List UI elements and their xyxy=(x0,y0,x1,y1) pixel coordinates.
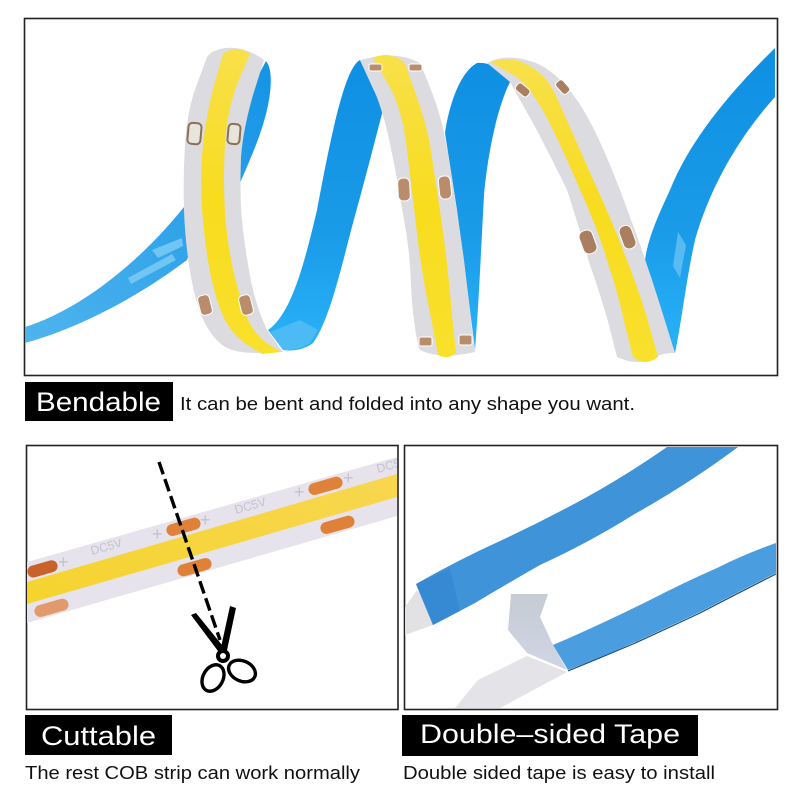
label: Cuttable xyxy=(25,715,172,755)
panel: double-sided tape photo xyxy=(404,446,778,710)
upper strip white end xyxy=(405,590,475,635)
solder pads loop two xyxy=(369,64,472,346)
strip markings: DC5V xyxy=(233,495,268,517)
dashed cut line xyxy=(159,462,220,640)
strip markings: + xyxy=(200,510,211,530)
solder pads loop three xyxy=(514,78,638,256)
caption: tape: Double sided tape is easy to install xyxy=(403,762,715,783)
blue tape: right span highlight xyxy=(673,232,686,278)
blue tape: third span xyxy=(445,63,510,350)
yellow light band xyxy=(27,474,397,604)
strip markings: + xyxy=(294,482,305,502)
strip markings: DC5V xyxy=(89,536,124,558)
label: Bendable xyxy=(25,382,173,421)
solder pads loop one xyxy=(187,123,254,316)
blue tape: right span xyxy=(645,48,775,353)
strip loop one xyxy=(184,48,283,354)
lower peeled backing xyxy=(508,594,567,670)
white COB strip xyxy=(27,457,397,623)
caption: bendable: It can be bent and folded into any shape you want. xyxy=(180,393,635,414)
tail printed marks xyxy=(128,238,183,284)
strip markings: + xyxy=(343,468,354,488)
blue tape: second span xyxy=(268,60,383,351)
label: Double-sided Tape: Double–sided Tape xyxy=(420,719,680,749)
panel: cuttable strip photo xyxy=(26,446,410,710)
upper blue tape xyxy=(416,447,738,625)
strip artwork xyxy=(26,454,410,623)
strip markings: DC5V xyxy=(375,454,410,476)
upper tape fold shading xyxy=(416,568,460,625)
strip markings xyxy=(58,459,397,566)
lower white strip end xyxy=(455,656,567,708)
strip loop two xyxy=(360,55,475,357)
label: Cuttable: Cuttable xyxy=(41,721,156,751)
caption: cuttable: The rest COB strip can work normally xyxy=(25,762,361,783)
icon: scissors xyxy=(191,606,259,695)
strip loop three xyxy=(487,57,675,362)
label: Bendable: Bendable xyxy=(36,387,161,417)
strip markings: + xyxy=(152,524,163,544)
blue tape: left tail xyxy=(25,61,271,343)
label: Double-sided Tape xyxy=(402,715,698,756)
lower blue tape xyxy=(553,543,776,670)
orange solder pads xyxy=(26,475,356,618)
blue tape: second span highlight xyxy=(270,320,318,350)
strip markings: + xyxy=(58,552,69,572)
panel: bendable strip photo xyxy=(24,18,778,376)
